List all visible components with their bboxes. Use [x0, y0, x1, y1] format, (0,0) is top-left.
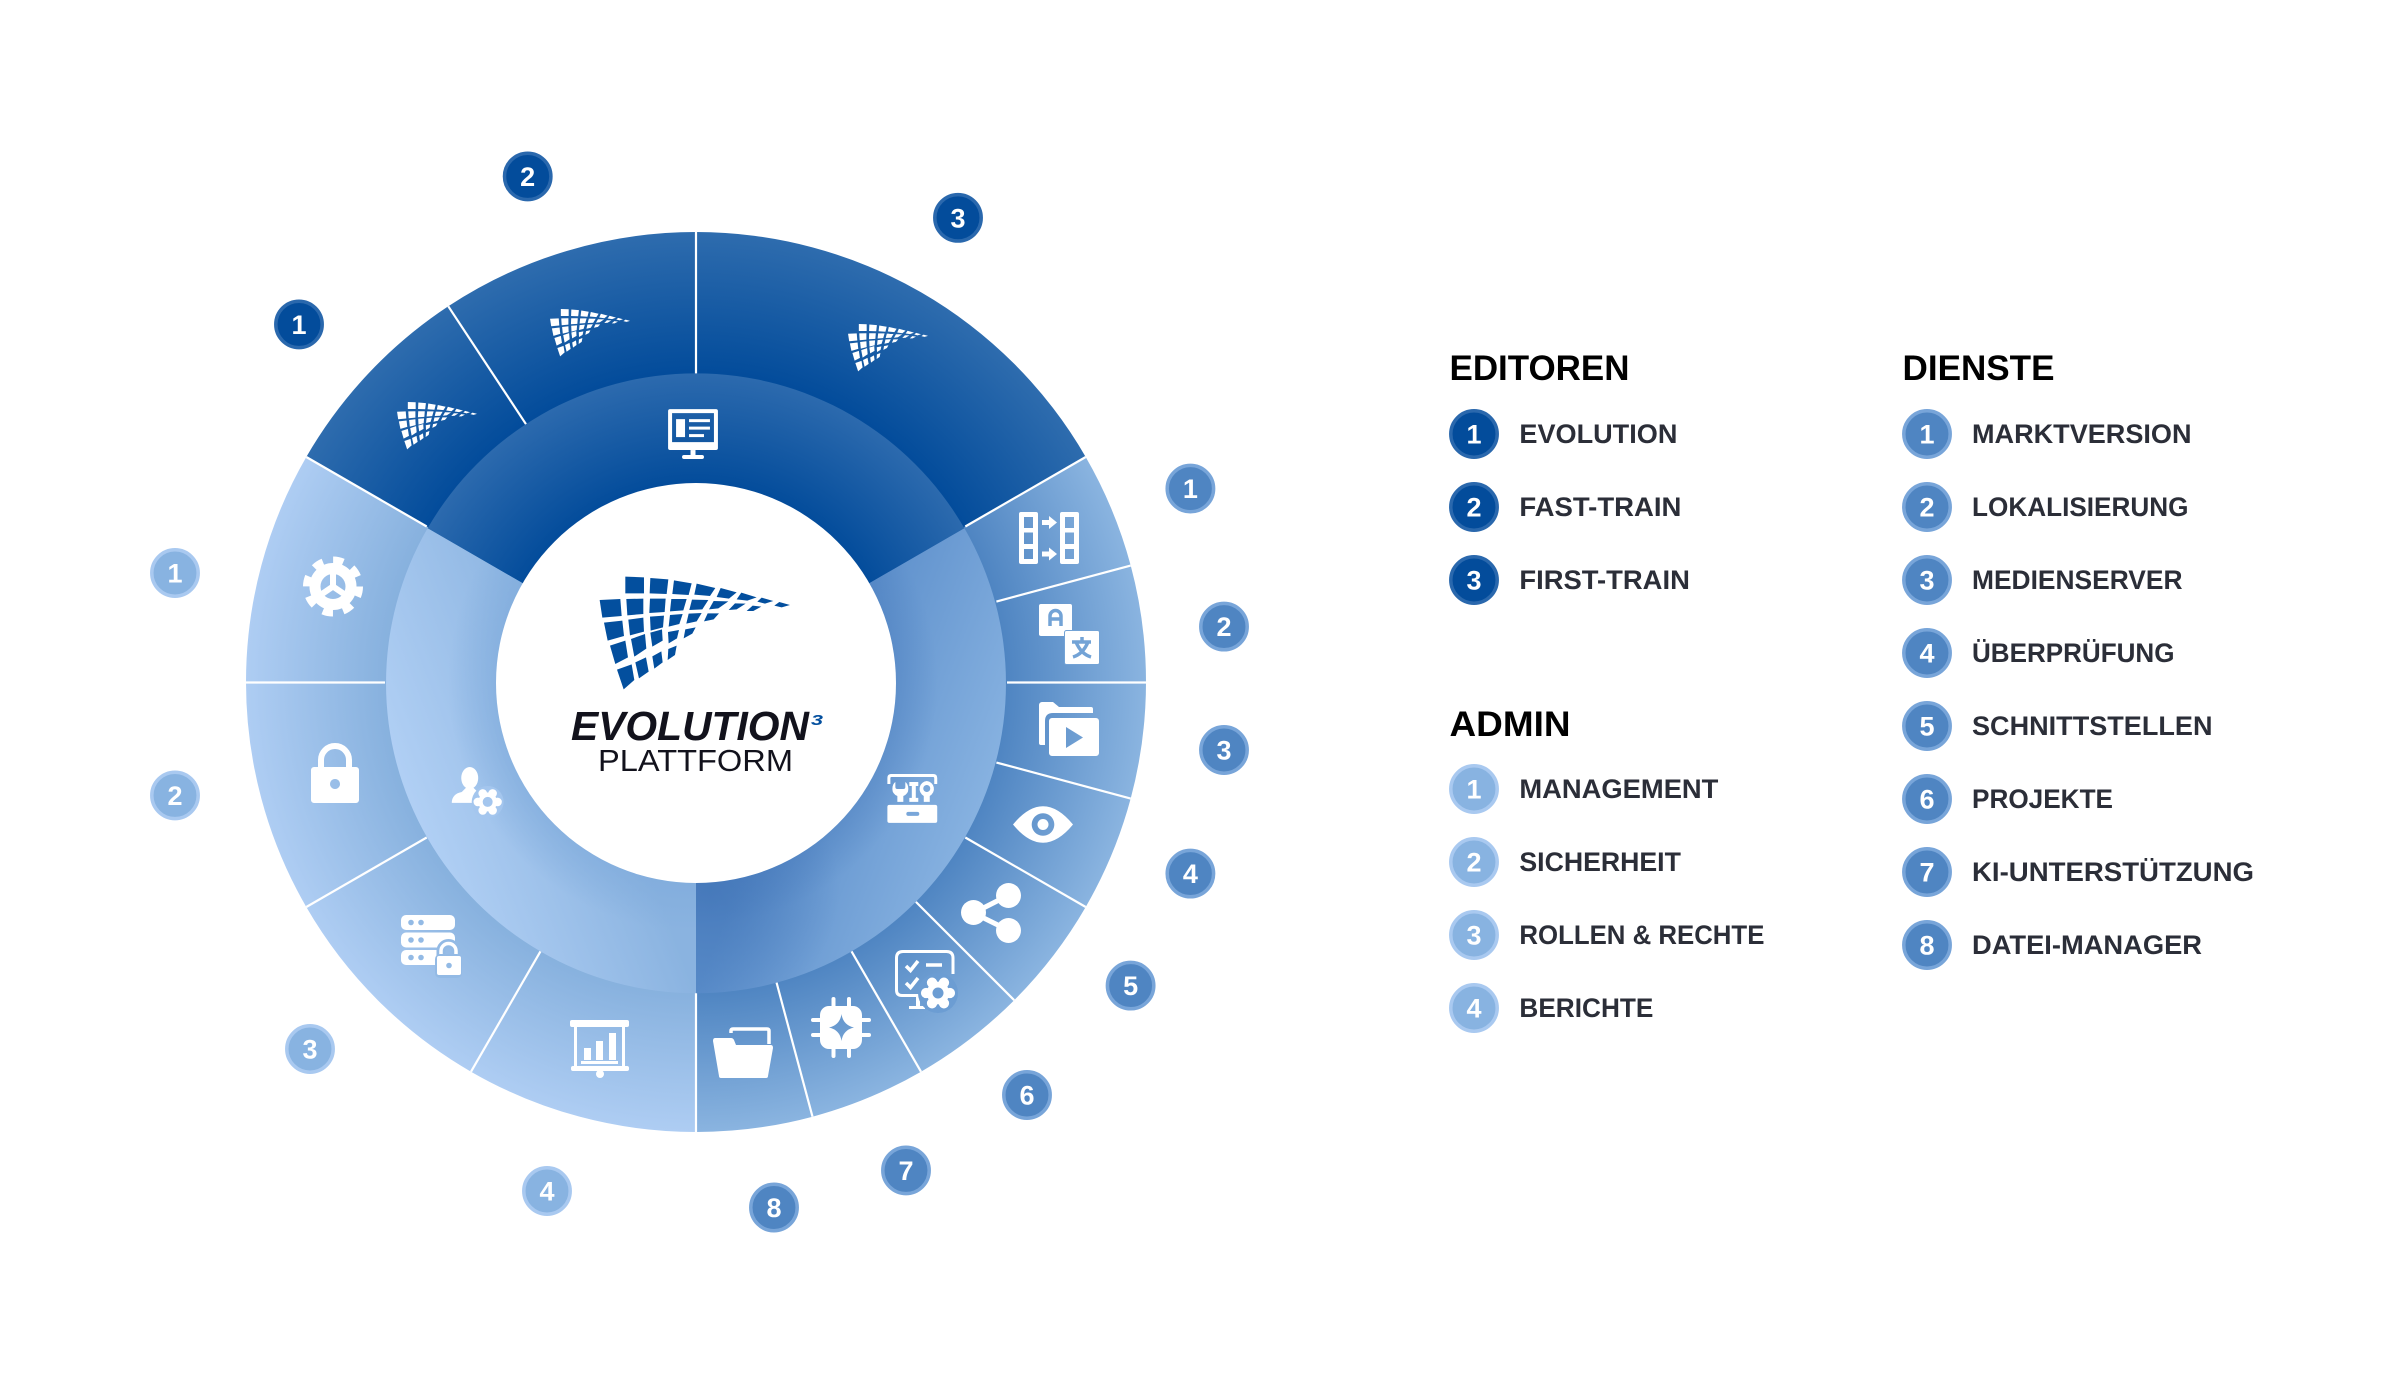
wheel badges: editoren [276, 153, 981, 348]
icon: toolbox [887, 776, 937, 823]
legend badges: dienste: 4 [1919, 639, 1935, 669]
legend: editoren [1450, 349, 1690, 603]
logo mark [600, 577, 790, 689]
icon: eye [1013, 806, 1073, 843]
wheel badges: editoren: 3 [950, 203, 966, 233]
legend labels: admin: SICHERHEIT [1519, 847, 1681, 877]
sector: editoren 2 [448, 232, 696, 422]
legend labels: admin: ROLLEN & RECHTE [1519, 920, 1764, 950]
sector divider lines [246, 232, 1146, 1132]
icon: folder [713, 1029, 773, 1078]
wheel badges: dienste: 8 [766, 1193, 782, 1223]
sector: rollen und rechte [306, 838, 540, 1072]
icon: steering gear [306, 560, 360, 613]
legend labels: dienste [1972, 419, 2254, 960]
legend badges: dienste: 1 [1919, 420, 1935, 450]
legend badges: admin: 3 [1466, 921, 1482, 951]
legend labels: editoren: FAST-TRAIN [1519, 492, 1681, 522]
panel: dienste inner ring [696, 528, 1006, 993]
legend labels: admin: BERICHTE [1519, 993, 1653, 1023]
legend labels: dienste: KI-UNTERSTÜTZUNG [1972, 857, 2254, 887]
icon: film transfer [1019, 512, 1079, 564]
wheel badges: dienste: 2 [1216, 612, 1232, 642]
wheel badges: dienste: 5 [1123, 971, 1138, 1001]
sector: berichte [471, 951, 696, 1132]
wheel badges: admin [152, 550, 570, 1214]
logo subtitle: PLATTFORM: PLATTFORM [598, 743, 793, 778]
wheel badges: editoren: 1 [291, 310, 307, 340]
wheel badges: editoren: 2 [520, 162, 535, 192]
legend badges: editoren: 3 [1466, 566, 1482, 596]
icon: presentation chart [570, 1020, 629, 1078]
sector: ki-unterstuetzung [776, 951, 921, 1117]
sector: sicherheit [246, 682, 427, 907]
panel: admin outer sectors [246, 457, 696, 1132]
wheel badges: dienste: 4 [1183, 859, 1198, 889]
legend badges: dienste: 5 [1919, 712, 1935, 742]
icon: monitor checklist gear [896, 952, 958, 1013]
legend badges: dienste: 8 [1919, 931, 1935, 961]
sector: editoren 3 [696, 232, 1086, 526]
legend: admin [1450, 705, 1764, 1031]
sector: projekte [852, 902, 1014, 1072]
legend labels: editoren [1519, 419, 1690, 595]
heading: editoren: EDITOREN [1450, 349, 1630, 388]
heading: admin: ADMIN [1450, 705, 1570, 744]
legend labels: editoren: FIRST-TRAIN [1519, 565, 1690, 595]
sector: management [246, 457, 427, 682]
legend badges: dienste: 2 [1919, 493, 1935, 523]
logo wordmark: EVOLUTION: EVOLUTION [571, 703, 810, 749]
icon: lock [311, 746, 359, 803]
heading: dienste: DIENSTE [1902, 349, 2054, 388]
sector: lokalisierung [996, 566, 1146, 682]
legend labels: editoren: EVOLUTION [1519, 419, 1677, 449]
ring backing [376, 362, 1016, 1002]
legend badges: dienste: 7 [1919, 858, 1935, 888]
central logo [496, 483, 896, 883]
icon: share [961, 883, 1021, 943]
legend labels: dienste: ÜBERPRÜFUNG [1972, 638, 2174, 668]
icon: ai chip [811, 997, 871, 1058]
wheel diagram [246, 232, 1146, 1132]
sector: schnittstellen [916, 838, 1086, 1000]
legend labels: dienste: DATEI-MANAGER [1972, 930, 2202, 960]
panel: dienste outer sectors [696, 457, 1146, 1132]
legend labels: dienste: LOKALISIERUNG [1972, 492, 2188, 522]
sector: ueberpruefung [965, 762, 1131, 907]
sector: medienserver [996, 682, 1146, 798]
panel: admin inner ring [386, 528, 696, 993]
icon: user gear [452, 767, 504, 818]
legend badges: editoren: 1 [1466, 420, 1482, 450]
legend badges: admin: 4 [1466, 994, 1482, 1024]
wheel badges: dienste [751, 465, 1247, 1231]
wheel badges: dienste: 6 [1019, 1081, 1035, 1111]
legend labels: dienste: MARKTVERSION [1972, 419, 2192, 449]
legend badges: dienste [1904, 411, 1950, 968]
sector: editoren 1 [306, 306, 525, 526]
legend labels: dienste: PROJEKTE [1972, 784, 2113, 814]
legend badges: admin: 1 [1466, 775, 1482, 805]
wheel badges: dienste: 7 [898, 1156, 914, 1186]
legend: dienste [1902, 349, 2254, 968]
legend labels: admin: MANAGEMENT [1519, 774, 1719, 804]
legend badges: editoren: 2 [1466, 493, 1482, 523]
wheel badges: dienste: 3 [1216, 736, 1232, 766]
wheel badges: admin: 1 [167, 559, 183, 589]
legend labels: dienste: MEDIENSERVER [1972, 565, 2182, 595]
legend badges: admin: 2 [1466, 848, 1482, 878]
legend labels: admin [1519, 774, 1764, 1023]
legend badges: editoren [1451, 411, 1497, 603]
panel: editoren outer sectors [306, 232, 1086, 526]
icon: server lock [401, 915, 462, 978]
legend labels: dienste: SCHNITTSTELLEN [1972, 711, 2212, 741]
legend badges: admin [1451, 766, 1497, 1031]
logo superscript: 3 [811, 712, 824, 729]
wheel badges: admin: 2 [167, 781, 183, 811]
wheel badges: dienste: 1 [1183, 474, 1198, 504]
icon: translate [1039, 604, 1100, 664]
icon: monitor layout [668, 409, 718, 459]
sector: marktversion [965, 457, 1131, 602]
legend badges: dienste: 3 [1919, 566, 1935, 596]
white centre circle [496, 483, 896, 883]
panel: editoren inner ring [428, 373, 964, 584]
wheel badges: admin: 3 [302, 1035, 318, 1065]
sector: datei-manager [696, 982, 812, 1132]
icon: media folder [1039, 702, 1099, 756]
wheel badges: admin: 4 [539, 1177, 555, 1207]
legend badges: dienste: 6 [1919, 785, 1935, 815]
